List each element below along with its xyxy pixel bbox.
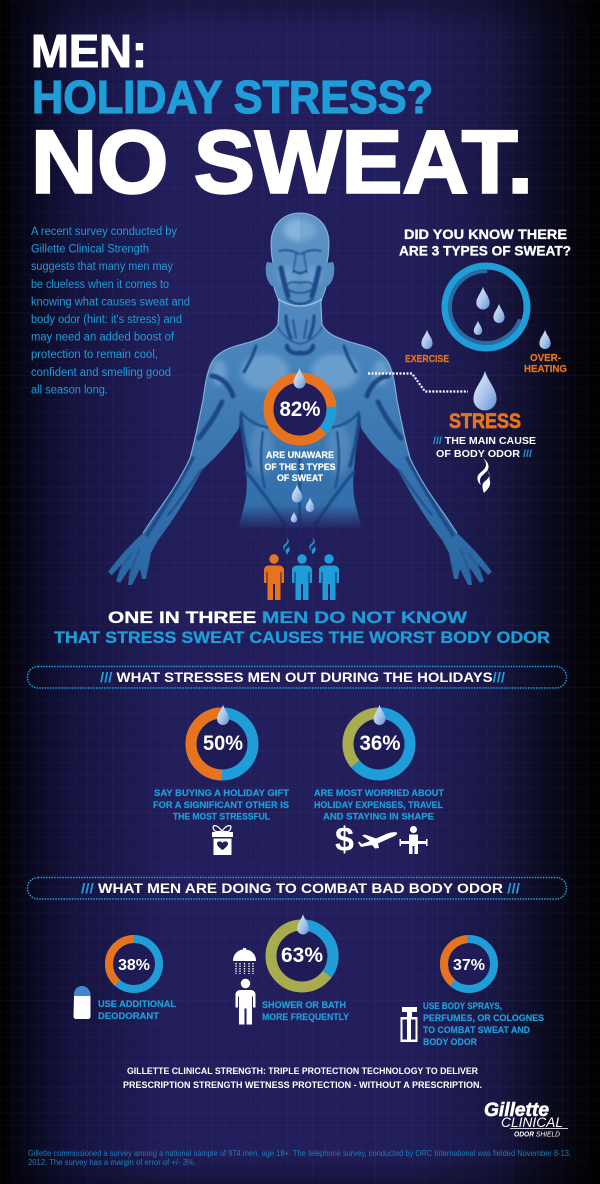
tagline: PRESCRIPTION STRENGTH WETNESS PROTECTION - WITHOUT A PRESCRIPTION. bbox=[123, 1080, 482, 1090]
icon: shower head bbox=[233, 948, 256, 974]
headline: one in three: THAT STRESS SWEAT CAUSES THE WORST BODY ODOR bbox=[54, 628, 550, 647]
banner: what stresses men out bbox=[28, 666, 566, 688]
caption 63 percent: MORE FREQUENTLY bbox=[262, 1012, 350, 1023]
label: stress: STRESS bbox=[449, 410, 521, 433]
icon: exercise drop bbox=[421, 330, 433, 349]
caption 36 percent: AND STAYING IN SHAPE bbox=[323, 812, 434, 822]
label: exercise: EXERCISE bbox=[405, 354, 449, 365]
icon: perfume bottle bbox=[400, 1007, 418, 1042]
banner: what men are doing: /// WHAT MEN ARE DOING TO COMBAT BAD BODY ODOR /// bbox=[81, 880, 520, 896]
intro text block: may need an added boost of bbox=[31, 332, 175, 344]
icon: airplane bbox=[358, 832, 397, 848]
label: overheating: HEATING bbox=[524, 364, 567, 375]
caption 63 percent bbox=[262, 1000, 350, 1023]
label: main cause of body odor: /// THE MAIN CAUSE bbox=[433, 435, 536, 447]
value 50 percent: 50% bbox=[203, 732, 243, 755]
icon: deodorant bbox=[74, 986, 91, 1019]
value 36 percent: 36% bbox=[360, 732, 401, 755]
caption 63 percent: SHOWER OR BATH bbox=[262, 1000, 346, 1011]
intro text block: suggests that many men may bbox=[31, 261, 173, 273]
icon: gift bbox=[212, 826, 233, 855]
heading: did you know bbox=[399, 227, 571, 258]
value 63 percent: 63% bbox=[281, 944, 323, 967]
stat: 38 percent deodorant bbox=[74, 929, 176, 1022]
caption 36 percent: ARE MOST WORRIED ABOUT bbox=[314, 788, 444, 799]
tagline: GILLETTE CLINICAL STRENGTH: TRIPLE PROTECTION TECHNOLOGY TO DELIVER bbox=[127, 1066, 478, 1076]
caption 37 percent: TO COMBAT SWEAT AND bbox=[423, 1025, 530, 1036]
value 38 percent: 38% bbox=[118, 957, 150, 974]
caption 37 percent: USE BODY SPRAYS, bbox=[423, 1001, 502, 1012]
stat: 36 percent expenses bbox=[314, 700, 444, 859]
caption 82 percent: OF SWEAT bbox=[277, 473, 323, 484]
icon: drop on donut bbox=[294, 368, 305, 388]
footnote: Gillette commissioned a survey among a national sample of 974 men, age 18+. The telephone survey, conducted by ORC International was fielded November 8-13, bbox=[28, 1149, 571, 1158]
stat: 82 percent unaware bbox=[264, 368, 336, 522]
caption 38 percent: USE ADDITIONAL bbox=[98, 999, 176, 1010]
intro text block bbox=[31, 226, 190, 396]
heading: did you know: ARE 3 TYPES OF SWEAT? bbox=[399, 244, 571, 258]
icon: drop bbox=[297, 914, 309, 934]
intro text block: confident and smelling good bbox=[31, 367, 171, 379]
label: overheating bbox=[524, 353, 567, 375]
headline: one in three: ONE IN THREE MEN DO NOT KNOW bbox=[108, 608, 468, 627]
footnote bbox=[28, 1149, 571, 1167]
caption 50 percent: SAY BUYING A HOLIDAY GIFT bbox=[154, 788, 289, 799]
icon: weightlifter bbox=[400, 826, 428, 854]
caption 82 percent bbox=[264, 450, 336, 484]
intro text block: body odor (hint: it's stress) and bbox=[31, 314, 182, 326]
title line: no sweat: NO SWEAT. bbox=[31, 112, 533, 212]
caption 50 percent: FOR A SIGNIFICANT OTHER IS bbox=[153, 800, 289, 811]
intro text block: Gillette Clinical Strength bbox=[31, 244, 149, 256]
intro text block: all season long. bbox=[31, 384, 108, 396]
icon: stress drop bbox=[473, 371, 497, 410]
caption 50 percent: THE MOST STRESSFUL bbox=[173, 812, 270, 822]
donut 38 percent bbox=[99, 929, 169, 999]
icon: person bbox=[236, 979, 256, 1024]
label: overheating: OVER- bbox=[530, 353, 561, 364]
footnote: 2012. The survey has a margin of error of +/- 3%. bbox=[28, 1158, 196, 1167]
icon: falling drops bbox=[291, 484, 314, 522]
banner: what men are doing bbox=[28, 878, 566, 899]
icon: overheating drop bbox=[539, 330, 551, 349]
banner: what stresses men out: /// WHAT STRESSES MEN OUT DURING THE HOLIDAYS /// bbox=[100, 669, 505, 685]
logo: gillette clinical odor shield: CLINICAL bbox=[501, 1115, 563, 1130]
ring with drops bbox=[440, 261, 532, 353]
icon: drop bbox=[374, 705, 385, 725]
dotted connector bbox=[368, 374, 468, 392]
icon: three men with steam bbox=[264, 537, 339, 600]
intro text block: knowing what causes sweat and bbox=[31, 296, 190, 308]
logo: gillette clinical odor shield bbox=[484, 1100, 568, 1138]
title line: holiday stress: HOLIDAY STRESS? bbox=[32, 71, 433, 123]
caption 36 percent bbox=[314, 788, 444, 822]
intro text block: protection to remain cool, bbox=[31, 349, 158, 361]
donut 82 percent bbox=[266, 375, 334, 443]
tagline bbox=[123, 1066, 482, 1090]
icon: white steam bbox=[477, 458, 490, 493]
caption 50 percent bbox=[153, 788, 289, 822]
caption 82 percent: OF THE 3 TYPES bbox=[264, 462, 336, 473]
donut 50 percent bbox=[191, 713, 253, 775]
donut 36 percent bbox=[335, 700, 423, 788]
caption 37 percent: PERFUMES, OR COLOGNES bbox=[423, 1013, 544, 1024]
caption 82 percent: ARE UNAWARE bbox=[266, 450, 334, 461]
stat: 63 percent shower bbox=[233, 914, 350, 1024]
donut 37 percent bbox=[434, 929, 504, 999]
donut 63 percent bbox=[271, 925, 333, 987]
caption 36 percent: HOLIDAY EXPENSES, TRAVEL bbox=[314, 800, 443, 811]
caption 37 percent bbox=[423, 1001, 544, 1048]
human body illustration bbox=[108, 213, 492, 585]
icon: dollar: $ bbox=[335, 821, 354, 859]
label: main cause of body odor: OF BODY ODOR /// bbox=[436, 448, 532, 460]
panel: three types of sweat bbox=[368, 227, 571, 493]
headline: one in three bbox=[54, 608, 550, 647]
stat: 37 percent sprays bbox=[400, 929, 544, 1048]
heading: did you know: DID YOU KNOW THERE bbox=[404, 227, 567, 242]
logo: gillette clinical odor shield: Gillette bbox=[484, 1100, 549, 1121]
intro text block: A recent survey conducted by bbox=[31, 226, 177, 238]
icon: drop bbox=[217, 705, 229, 725]
caption 38 percent bbox=[98, 999, 176, 1022]
intro text block: be clueless when it comes to bbox=[31, 279, 169, 291]
title bbox=[31, 25, 533, 212]
value 37 percent: 37% bbox=[453, 957, 485, 974]
caption 37 percent: BODY ODOR bbox=[423, 1037, 477, 1048]
logo: gillette clinical odor shield: ODOR SHIELD bbox=[514, 1132, 560, 1138]
value 82 percent: 82% bbox=[280, 398, 321, 421]
stat: 50 percent gift bbox=[153, 705, 289, 855]
label: main cause of body odor bbox=[433, 435, 536, 460]
title line: men: MEN: bbox=[31, 25, 147, 77]
caption 38 percent: DEODORANT bbox=[98, 1011, 159, 1022]
